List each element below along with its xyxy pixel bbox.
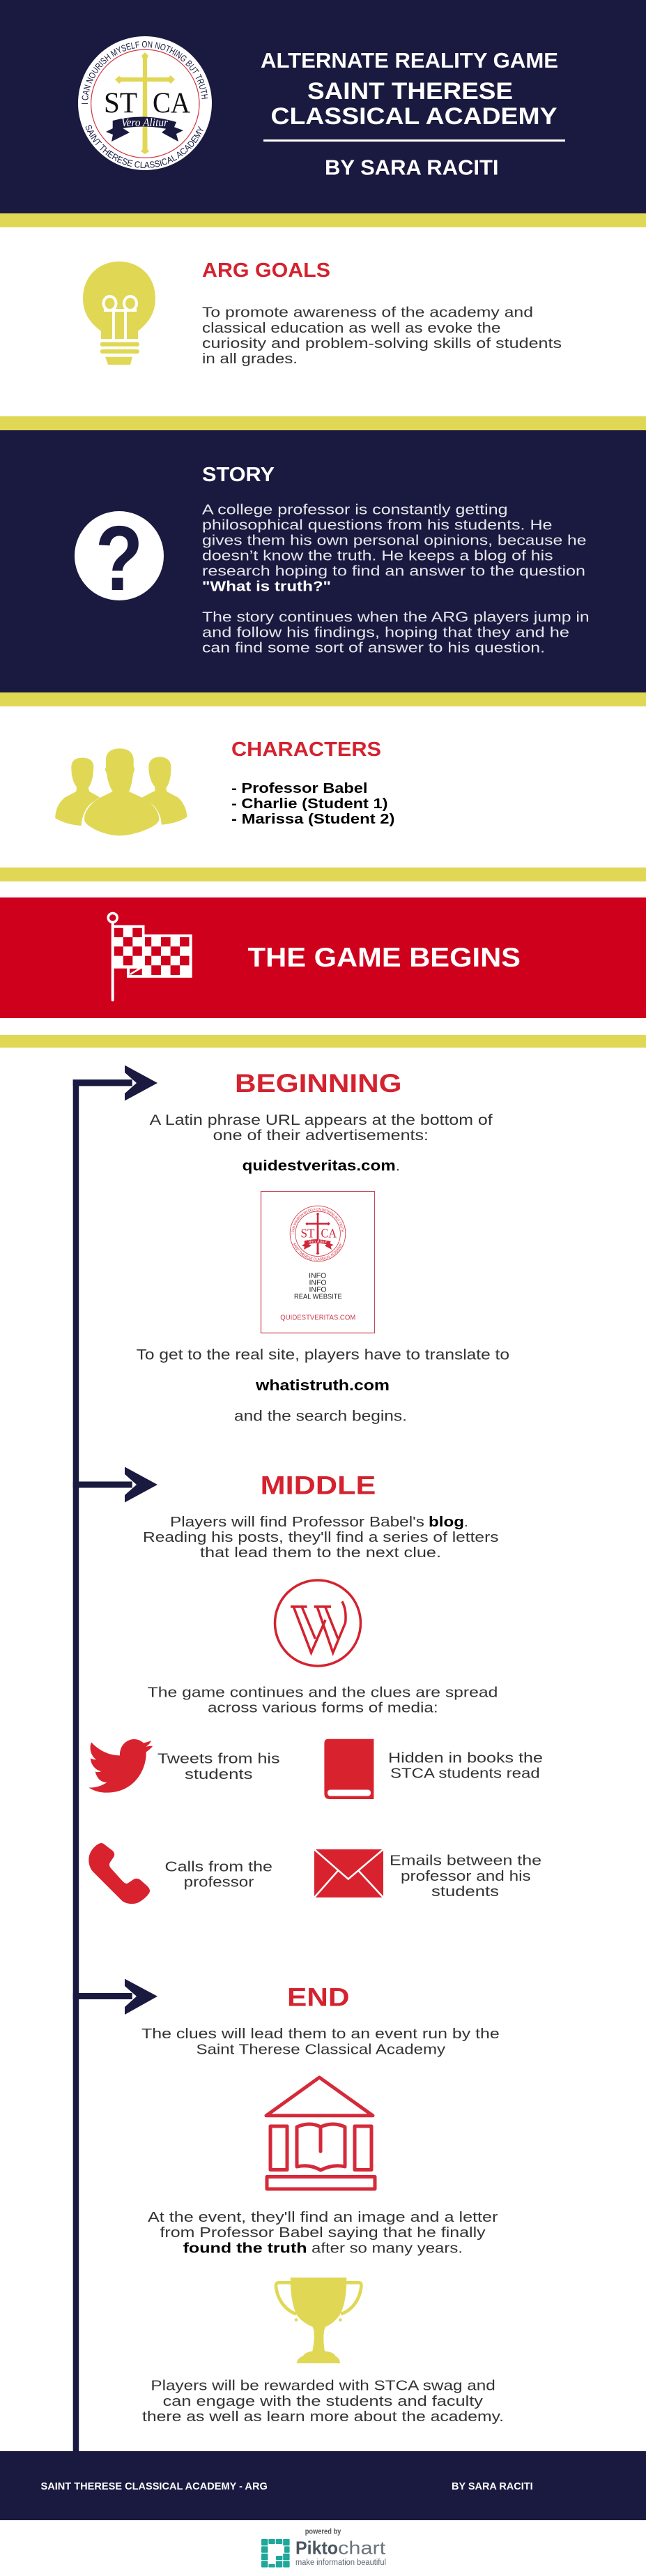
panel: characters [0, 706, 646, 867]
timeline line [73, 1079, 79, 2451]
text: story: can find some sort of answer to his question. [202, 640, 545, 656]
text: found the truth [148, 2209, 498, 2256]
panel: end [73, 1979, 504, 2425]
text: media intro: across various forms of media: [208, 1699, 438, 1715]
text: translation: To get to the real site, players have to translate to [137, 1347, 509, 1363]
icon: academy building [266, 2077, 375, 2189]
heading: story: STORY [202, 464, 275, 486]
heading: end: END [287, 1983, 350, 2011]
icon: red crest: I CAN NOURISH MYSELF ON NOTHING BUT TRUTH [291, 1208, 344, 1234]
piktochart badge: chart [338, 2538, 386, 2559]
text: found the truth: after so many years. [312, 2240, 463, 2256]
advertisement card: INFO [309, 1272, 326, 1280]
text: rewards: there as well as learn more about the academy. [142, 2409, 504, 2425]
text: latin phrase: quidestveritas.com [243, 1158, 396, 1174]
text: story: philosophical questions from his students. He [202, 517, 552, 533]
text: latin phrase [150, 1112, 493, 1174]
text: goals: in all grades. [202, 351, 298, 367]
icon: red crest: ST [301, 1227, 315, 1241]
text: goals [202, 305, 562, 367]
text: translation [137, 1347, 509, 1425]
icon: three people [55, 748, 187, 835]
icon: piktochart grid [261, 2539, 290, 2568]
icon: school crest logo: Vero Alitur [121, 116, 168, 129]
text: translation: and the search begins. [234, 1409, 407, 1425]
text: blog: blog [429, 1514, 464, 1530]
text: rewards [142, 2378, 504, 2425]
icon: envelope [314, 1849, 383, 1897]
text: calls: Calls from the [164, 1859, 272, 1874]
text: translation: whatistruth.com [255, 1378, 390, 1394]
panel: story [0, 430, 646, 692]
text: story [202, 502, 590, 656]
powered by: powered by [305, 2527, 341, 2536]
text: books: STCA students read [390, 1766, 540, 1782]
text: calls [164, 1859, 272, 1890]
arrow: middle [73, 1467, 157, 1502]
heading: the game begins: THE GAME BEGINS [248, 943, 521, 973]
icon: question mark: ? [95, 506, 143, 609]
text: tweets: students [185, 1766, 252, 1782]
title: SAINT THERESE [307, 78, 513, 105]
piktochart wordmark: Pikto [295, 2538, 338, 2559]
list: characters: - Marissa (Student 2) [231, 811, 394, 827]
list: characters [231, 780, 394, 827]
icon: checkered flag [108, 914, 192, 1001]
icon: twitter bird [89, 1739, 153, 1793]
icon: school crest logo: I CAN NOURISH MYSELF ON NOTHING BUT TRUTH [82, 40, 208, 104]
heading: characters: CHARACTERS [231, 738, 381, 761]
text: latin phrase: one of their advertisements: [213, 1128, 429, 1144]
text: rewards: can engage with the students and faculty [163, 2393, 484, 2409]
text: event: Saint Therese Classical Academy [197, 2041, 446, 2057]
icon: phone [89, 1843, 150, 1904]
byline: BY SARA RACITI [325, 156, 499, 180]
text: calls: professor [184, 1874, 254, 1890]
text: blog [143, 1514, 499, 1561]
title: CLASSICAL ACADEMY [270, 103, 557, 130]
text: event [141, 2026, 500, 2057]
icon: book [324, 1739, 374, 1799]
icon: school crest logo: ST [104, 88, 137, 120]
title: ALTERNATE REALITY GAME [261, 48, 558, 73]
text: story: research hoping to find an answer to the question [202, 563, 585, 579]
advertisement card: INFO [309, 1286, 327, 1294]
panel: header [0, 0, 646, 213]
text: found the truth: found the truth [183, 2240, 307, 2256]
icon: school crest logo: SAINT THERESE CLASSICAL ACADEMY [85, 125, 203, 169]
text: books [388, 1750, 543, 1782]
heading: ARG goals: ARG GOALS [202, 259, 330, 282]
text: emails [390, 1852, 541, 1900]
panel: footer [0, 2451, 646, 2520]
text: emails: professor and his [401, 1868, 531, 1884]
arrow: beginning [73, 1066, 157, 1100]
text: blog: that lead them to the next clue. [200, 1545, 441, 1561]
text: story: "What is truth?" [202, 579, 331, 594]
list: characters: - Charlie (Student 1) [231, 796, 387, 812]
footer author: BY SARA RACITI [452, 2480, 533, 2492]
icon: question mark [75, 506, 164, 609]
text: latin phrase: A Latin phrase URL appears at the bottom of [150, 1112, 493, 1128]
text: emails: Emails between the [390, 1852, 541, 1869]
advertisement card: REAL WEBSITE [294, 1293, 342, 1301]
icon: trophy [276, 2278, 361, 2363]
text: story: The story continues when the ARG players jump in [202, 609, 590, 625]
text: books: Hidden in books the [388, 1750, 543, 1766]
tagline: make information beautiful [295, 2559, 386, 2567]
icon: light bulb [83, 262, 155, 365]
panel: the game begins banner [0, 897, 646, 1018]
panel: middle [73, 1467, 543, 1904]
advertisement card: INFO [309, 1279, 327, 1287]
text: blog: Players will find Professor Babel's [170, 1514, 424, 1530]
text: goals: curiosity and problem-solving skills of students [202, 335, 562, 351]
text: story: doesn’t know the truth. He keeps a blog of his [202, 548, 553, 564]
icon: school crest logo: CA [153, 88, 191, 120]
heading: middle: MIDDLE [261, 1471, 376, 1499]
list: characters: - Professor Babel [231, 780, 368, 796]
text: emails: students [431, 1884, 499, 1900]
piktochart badge [261, 2527, 386, 2568]
text: media intro [148, 1685, 498, 1715]
icon: red crest [290, 1205, 346, 1262]
text: blog: . [464, 1514, 468, 1530]
icon: WordPress [275, 1580, 361, 1666]
text: tweets: Tweets from his [157, 1751, 280, 1767]
icon: red crest: CA [321, 1227, 337, 1241]
advertisement card: QUIDESTVERITAS.COM [280, 1314, 355, 1322]
arrow: end [73, 1979, 157, 2015]
icon: school crest logo [78, 36, 212, 170]
text: goals: classical education as well as evoke the [202, 320, 500, 336]
text: story: and follow his findings, hoping that they and he [202, 625, 569, 640]
text: goals: To promote awareness of the academy and [202, 305, 533, 321]
text: tweets [157, 1751, 280, 1782]
panel: ARG goals [0, 227, 646, 416]
advertisement card [261, 1191, 375, 1333]
text: latin phrase: . [396, 1158, 400, 1174]
panel: beginning [72, 1066, 509, 1425]
text: rewards: Players will be rewarded with STCA swag and [151, 2378, 495, 2394]
title [261, 48, 558, 130]
text: story: gives them his own personal opinions, because he [202, 533, 587, 548]
text: blog: Reading his posts, they'll find a series of letters [143, 1529, 499, 1545]
text: event: The clues will lead them to an event run by the [141, 2026, 500, 2042]
text: found the truth: from Professor Babel saying that he finally [160, 2225, 486, 2241]
text: found the truth: At the event, they'll find an image and a letter [148, 2209, 498, 2225]
text: story: A college professor is constantly getting [202, 502, 507, 517]
text: media intro: The game continues and the clues are spread [148, 1685, 498, 1700]
footer title: SAINT THERESE CLASSICAL ACADEMY - ARG [40, 2480, 268, 2492]
icon: red crest: SAINT THERESE CLASSICAL ACADEMY [293, 1243, 342, 1261]
icon: red crest: Vero Alitur [308, 1239, 328, 1245]
heading: beginning: BEGINNING [235, 1069, 401, 1098]
